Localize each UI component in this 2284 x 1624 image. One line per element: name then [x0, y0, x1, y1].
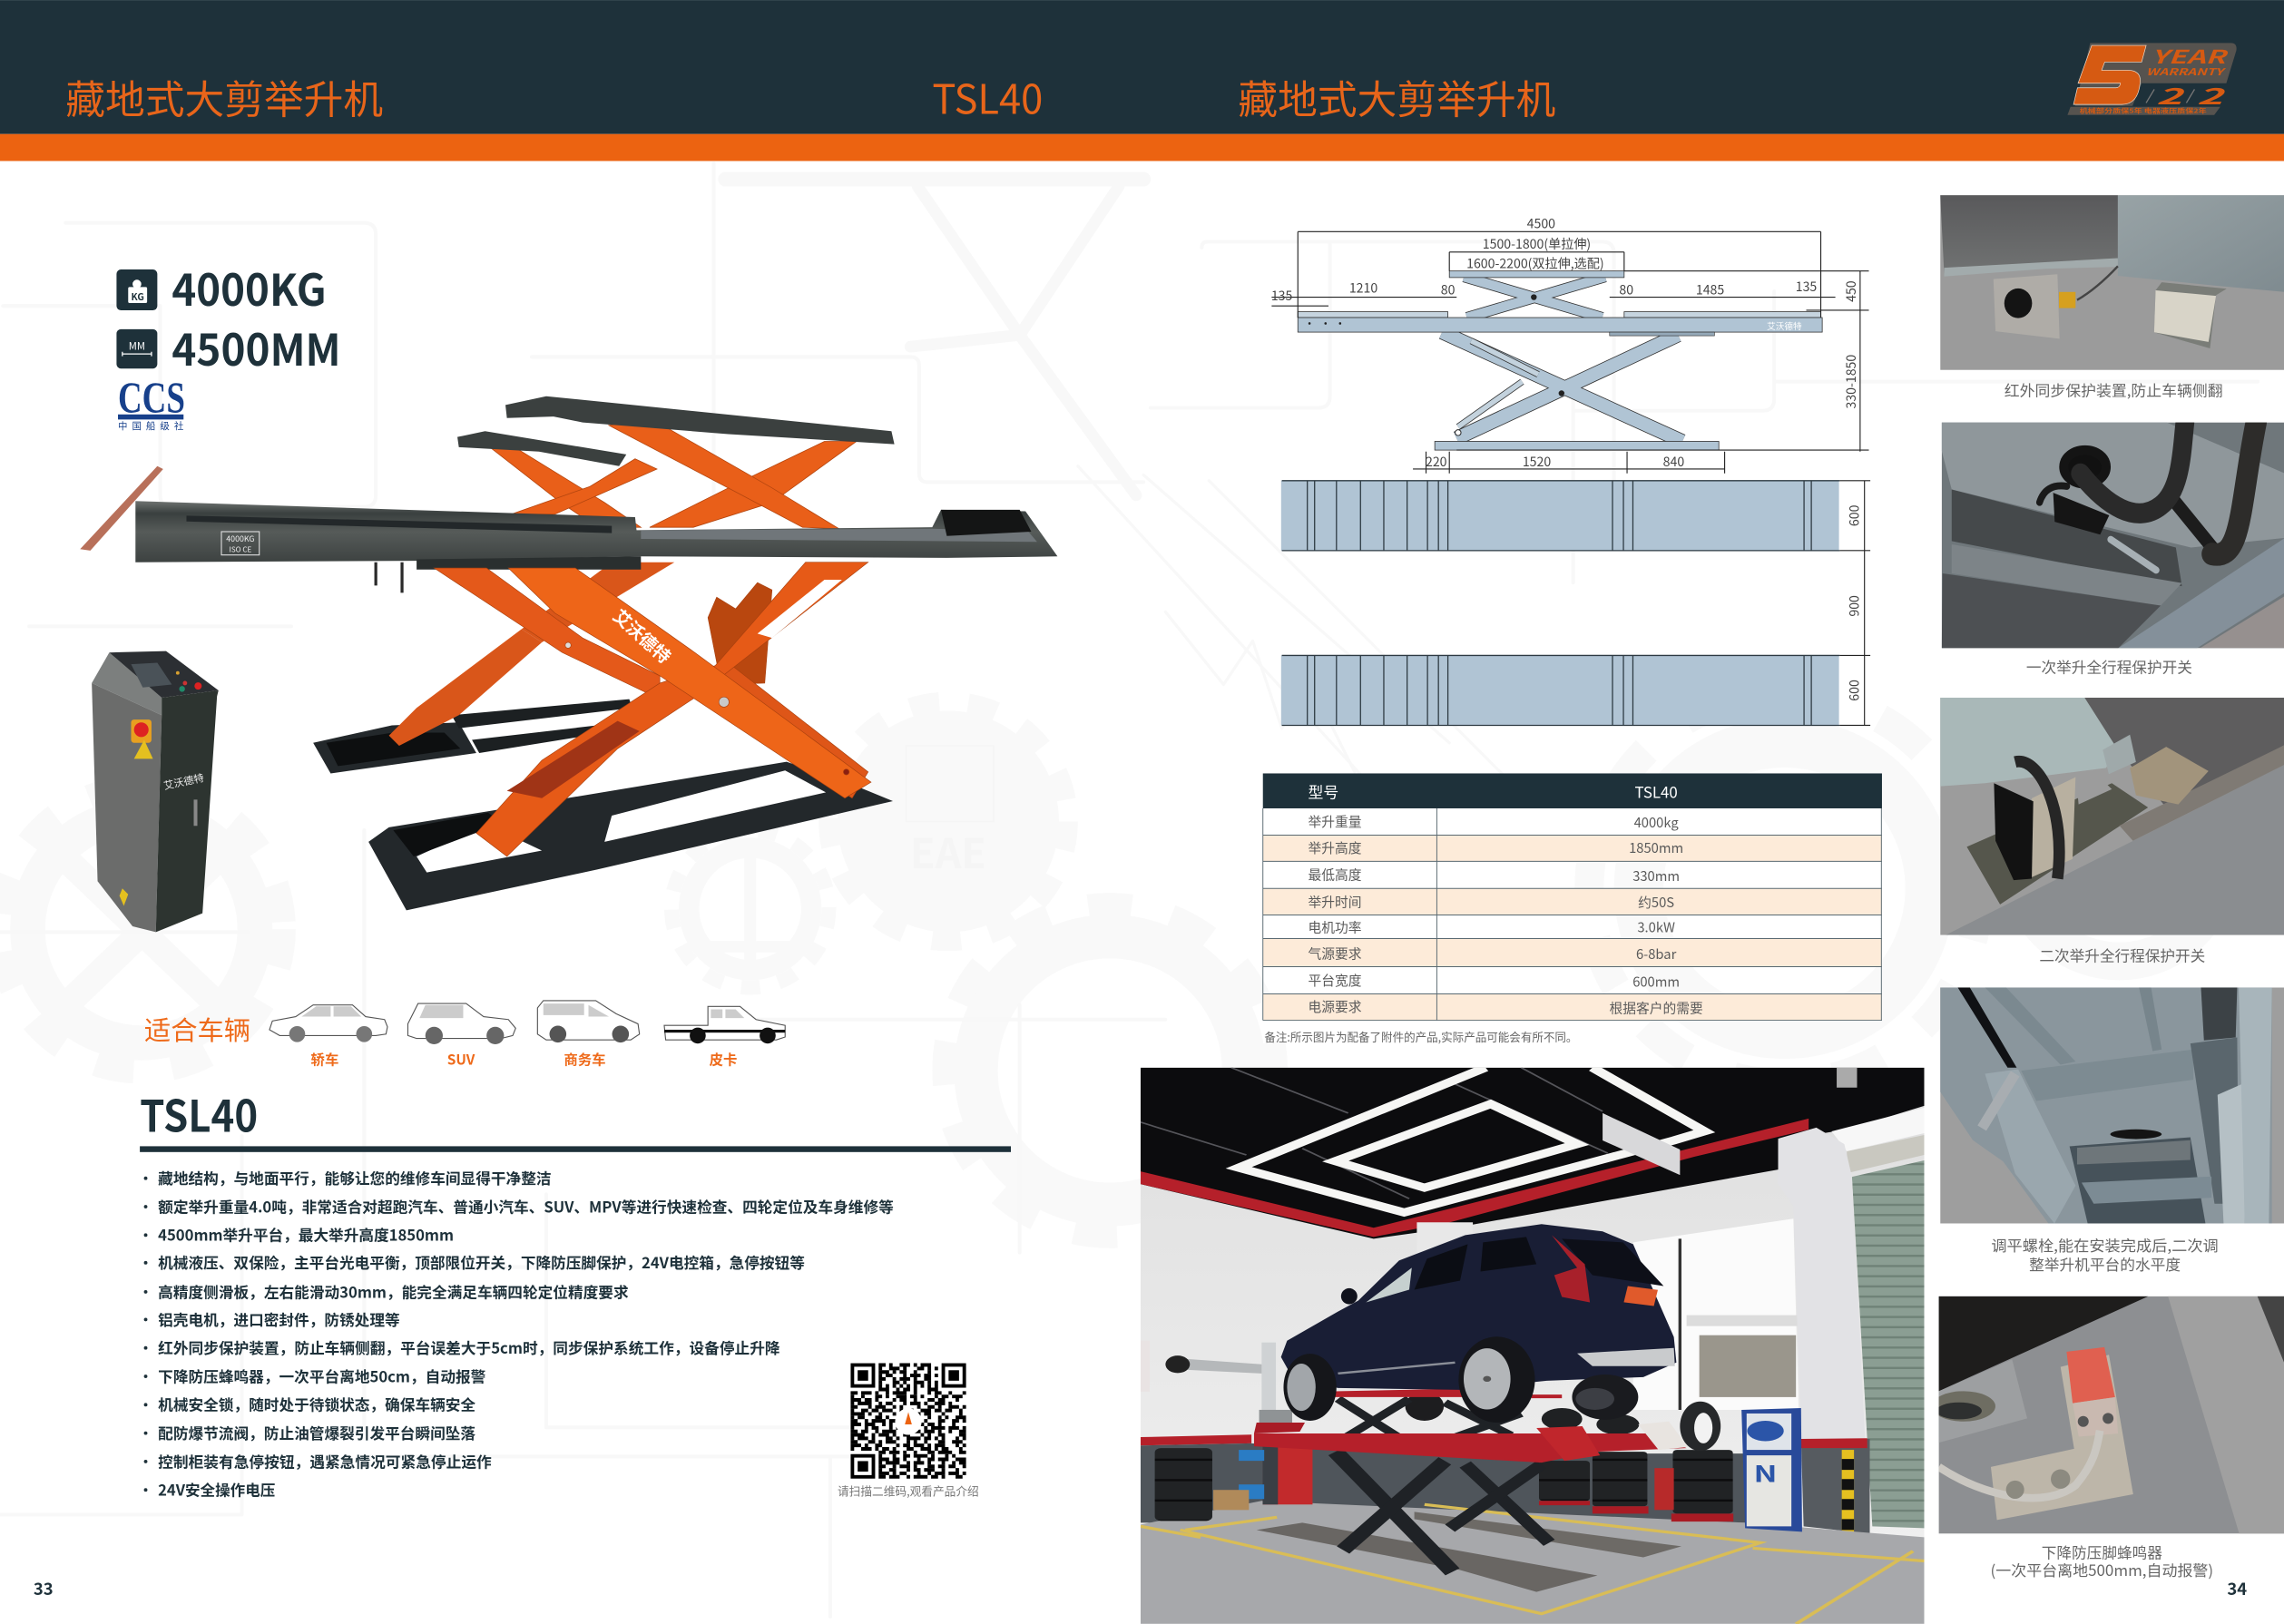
table rows — [1308, 812, 1703, 1018]
feature list: 高精度侧滑板，左右能滑动30mm，能完全满足车辆四轮定位精度要求 — [158, 1280, 629, 1302]
tool cabinet and red bin — [1213, 1446, 1674, 1510]
dimension labels: 135 — [1271, 287, 1293, 305]
pillar — [1779, 1128, 1870, 1533]
column behind — [1416, 1222, 1473, 1255]
ramp right — [941, 510, 1032, 536]
plan dimensions: 600 — [1845, 680, 1863, 701]
feature list: 配防爆节流阀，防止油管爆裂引发平台瞬间坠落 — [158, 1422, 475, 1443]
CCS logo: 中国船级社 — [118, 419, 183, 433]
lift lower scissors — [1336, 1452, 1549, 1572]
caption photo 2: 一次举升全行程保护开关 — [2026, 656, 2192, 678]
background watermark: gears and circuit lines: EAE — [910, 821, 986, 880]
car wheels — [1283, 1336, 1638, 1423]
upper scissors — [488, 419, 857, 529]
table rows: 举升高度 — [1308, 838, 1362, 857]
icon: length — [116, 329, 157, 368]
header band — [0, 0, 2284, 161]
table rows: 平台宽度 — [1308, 971, 1362, 990]
base frame — [1435, 441, 1719, 450]
table rows: 3.0kW — [1637, 917, 1675, 936]
feature list: 机械安全锁，随时处于待锁状态，确保车辆安全 — [158, 1394, 475, 1415]
feature list — [144, 1167, 894, 1501]
shutter — [1852, 1160, 1925, 1528]
icon: length: MM — [129, 338, 145, 353]
warranty badge: 2 — [2156, 79, 2187, 111]
car: SUV — [407, 1003, 515, 1044]
lower rear scissors — [389, 563, 674, 746]
top platform — [1449, 271, 1624, 278]
warranty badge: YEAR — [2152, 42, 2230, 69]
table rows: 电机功率 — [1308, 917, 1362, 936]
table rows: 6-8bar — [1636, 944, 1677, 964]
nitrogen machine: N — [1754, 1456, 1778, 1489]
table rows: 气源要求 — [1308, 944, 1362, 963]
deck plates — [1298, 312, 1821, 318]
rear wheel behind — [1406, 1392, 1444, 1421]
caption photo 4: 整举升机平台的水平度 — [2029, 1253, 2181, 1275]
red band — [1141, 1119, 1809, 1237]
floor pits — [1257, 1511, 1681, 1592]
table rows: 600mm — [1632, 973, 1680, 992]
yellow floor lines — [1141, 1504, 1925, 1624]
title left: 藏地式大剪举升机 — [65, 67, 383, 125]
wheel aligner arm — [1141, 1341, 1292, 1424]
label: SUV: SUV — [447, 1050, 475, 1070]
lower front scissors — [434, 563, 871, 856]
warranty badge — [2067, 42, 2237, 115]
detail photo 3 — [1940, 698, 2284, 935]
dimension labels: 4500 — [1527, 214, 1555, 232]
product photo: scissor lift — [80, 396, 1057, 910]
specification table — [1263, 773, 1882, 1021]
warranty badge: 机械部分质保5年 电器液压质保2年 — [2080, 105, 2207, 114]
spec: load capacity — [116, 255, 327, 318]
plan dimensions: 600 — [1845, 504, 1863, 526]
feature list: 控制柜装有急停按钮，遇紧急情况可紧急停止运作 — [158, 1450, 492, 1472]
upper scissor — [1464, 277, 1605, 318]
caption photo 5 — [1991, 1541, 2213, 1580]
dimension labels: 450 — [1842, 280, 1860, 302]
wall — [1141, 1068, 1925, 1624]
feature list: 下降防压蜂鸣器，一次平台离地50cm，自动报警 — [158, 1365, 486, 1386]
dimension labels: 1600-2200(双拉伸,选配) — [1466, 254, 1604, 272]
detail photo 5 — [1938, 1296, 2284, 1533]
car: sedan — [270, 1005, 387, 1042]
warranty badge: 2 — [2197, 79, 2228, 111]
upper platforms — [457, 396, 895, 466]
base frames — [313, 699, 893, 910]
yellow black post — [1842, 1450, 1854, 1537]
LED frames — [1239, 1068, 1704, 1212]
table rows: 电源要求 — [1308, 997, 1362, 1016]
table rows: 330mm — [1632, 866, 1680, 885]
caption photo 5: 下降防压脚蜂鸣器 — [2042, 1541, 2162, 1563]
icon: weight: KG — [132, 290, 144, 304]
car: pickup — [664, 1006, 785, 1043]
label: MPV: 商务车 — [564, 1050, 606, 1070]
table rows: 举升重量 — [1308, 812, 1362, 831]
brand on scissor arm: 艾沃德特 — [608, 602, 677, 669]
icon: weight — [116, 269, 157, 310]
label: pickup: 皮卡 — [710, 1050, 737, 1070]
feature list: 铝壳电机，进口密封件，防锈处理等 — [158, 1308, 400, 1330]
plan dimensions: 900 — [1845, 595, 1863, 617]
beam — [135, 501, 1057, 563]
dimension labels: 80 — [1619, 280, 1633, 298]
table rows: 4000kg — [1634, 813, 1679, 832]
table rows: 约50S — [1638, 893, 1674, 912]
lift main deck — [1254, 1422, 1688, 1463]
dimension labels: 840 — [1663, 453, 1684, 471]
CCS logo — [118, 374, 185, 433]
heading rule — [140, 1146, 1011, 1152]
table header: 型号 — [1308, 780, 1338, 803]
load plate: ISO CE — [230, 544, 251, 554]
technical side-view drawing — [1271, 214, 1869, 474]
wall base — [1141, 1434, 1745, 1522]
QR code — [850, 1364, 966, 1480]
dimension lines — [1271, 231, 1869, 474]
dimension labels: 330-1850 — [1842, 355, 1860, 409]
dimension labels: 220 — [1426, 453, 1447, 471]
load plate — [221, 532, 260, 555]
feature list: 24V安全操作电压 — [158, 1479, 276, 1501]
runway upper — [1281, 481, 1839, 551]
warranty badge: WARRANTY — [2146, 65, 2227, 79]
dimension labels: 1210 — [1349, 279, 1377, 298]
table rows: 1850mm — [1629, 838, 1683, 857]
length value: 4500MM — [172, 315, 341, 378]
table header: TSL40 — [1635, 780, 1678, 803]
caption photo 3: 二次举升全行程保护开关 — [2039, 944, 2206, 966]
table rows: 最低高度 — [1308, 866, 1362, 885]
suitable vehicles — [144, 1001, 785, 1070]
main beam: 艾沃德特 — [1767, 319, 1802, 332]
ceiling — [1141, 1068, 1925, 1238]
control cabinet: 艾沃德特 — [162, 770, 205, 793]
main beam — [1298, 318, 1822, 336]
table rows: 根据客户的需要 — [1610, 999, 1703, 1018]
load value: 4000KG — [172, 255, 327, 318]
car: MPV — [537, 1001, 640, 1042]
tyres — [1155, 1402, 1733, 1521]
load plate: 4000KG — [226, 533, 254, 544]
table rows: 举升时间 — [1308, 892, 1361, 911]
ceiling rails — [1141, 1068, 1608, 1198]
caption photo 4: 调平螺栓,能在安装完成后,二次调 — [1991, 1234, 2219, 1256]
title right: 藏地式大剪举升机 — [1238, 67, 1555, 125]
control cabinet — [92, 651, 219, 932]
feature list: 额定举升重量4.0吨，非常适合对超跑汽车、普通小汽车、SUV、MPV等进行快速检查、四轮定位及车身维修等 — [158, 1195, 894, 1217]
label: sedan: 轿车 — [311, 1050, 338, 1070]
feature list: 藏地结构，与地面平行，能够让您的维修车间显得干净整洁 — [158, 1167, 552, 1189]
beam top groove — [186, 515, 612, 533]
caption photo 4 — [1991, 1234, 2219, 1275]
plan dimensions — [1839, 481, 1870, 725]
page number right: 34 — [2227, 1577, 2247, 1600]
lower scissor — [1442, 332, 1682, 441]
dimension labels: 1500-1800(单拉伸) — [1483, 235, 1591, 253]
model title: TSL40 — [932, 66, 1043, 125]
car body — [1281, 1224, 1676, 1390]
detail photo 1 — [1940, 195, 2284, 370]
window area — [1633, 1218, 1799, 1410]
vehicles heading: 适合车辆 — [144, 1010, 250, 1048]
detail photo 4 — [1940, 987, 2284, 1223]
lift top deck — [1318, 1389, 1463, 1397]
ramp left — [80, 466, 163, 551]
dimension labels: 1485 — [1696, 280, 1724, 298]
page number left: 33 — [34, 1577, 54, 1600]
CCS logo: CCS — [118, 374, 185, 422]
lift upper scissors — [1338, 1399, 1521, 1441]
dimension labels: 135 — [1796, 278, 1817, 296]
caption photo 5: (一次平台离地500mm,自动报警) — [1991, 1559, 2213, 1580]
runway lower — [1281, 655, 1839, 725]
beam right plate — [641, 529, 1037, 542]
hanging sign — [1603, 1113, 1680, 1175]
lower strip and cylinders — [376, 556, 641, 592]
table header — [1263, 773, 1882, 808]
feature list: 4500mm举升平台，最大举升高度1850mm — [158, 1224, 454, 1246]
nitrogen machine — [1741, 1408, 1802, 1531]
feature list: 机械液压、双保险，主平台光电平衡，顶部限位开关，下降防压脚保护，24V电控箱，急停按钮等 — [158, 1251, 805, 1273]
dimension labels: 1520 — [1523, 453, 1551, 471]
dimension labels: 80 — [1441, 280, 1456, 298]
technical plan view — [1281, 481, 1870, 725]
feature list: 红外同步保护装置，防止车辆侧翻，平台误差大于5cm时，同步保护系统工作，设备停止升降 — [158, 1336, 780, 1358]
caption photo 1: 红外同步保护装置,防止车辆侧翻 — [2005, 379, 2223, 401]
detail photo 2 — [1942, 423, 2284, 648]
ceiling pale end — [1837, 1068, 1857, 1088]
QR caption: 请扫描二维码,观看产品介绍 — [838, 1482, 979, 1500]
table note: 备注:所示图片为配备了附件的产品,实际产品可能会有所不同。 — [1264, 1028, 1577, 1045]
workshop photo — [1140, 1067, 1924, 1624]
floor — [1141, 1501, 1925, 1624]
dimension labels — [1271, 214, 1860, 471]
spec: platform length — [116, 315, 341, 378]
model heading: TSL40 — [140, 1081, 258, 1144]
